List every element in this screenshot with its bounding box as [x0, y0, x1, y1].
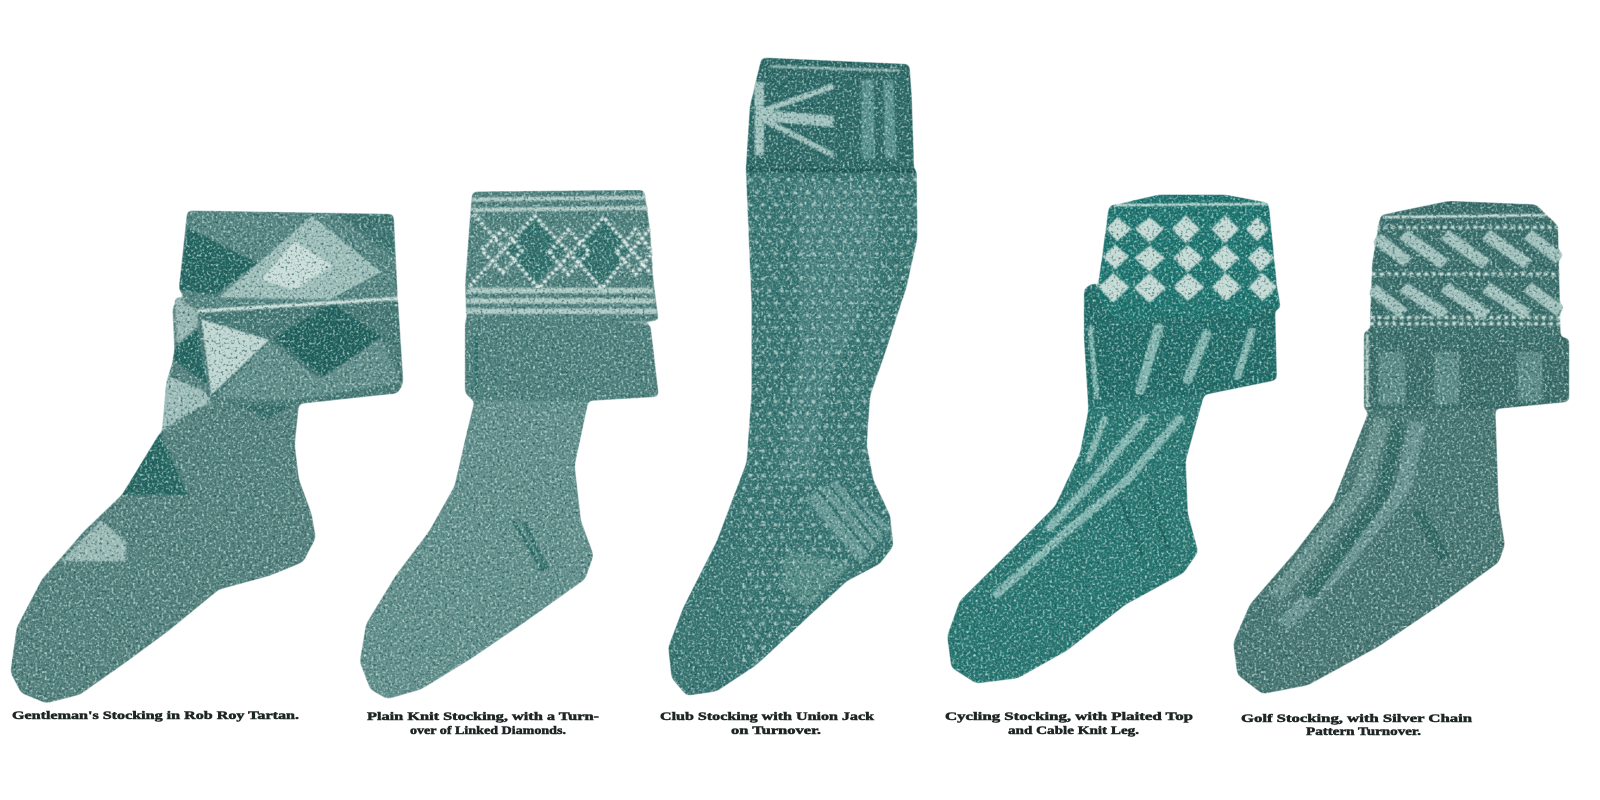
caption: club: on Turnover. [731, 725, 821, 737]
tartan leg and foot [11, 293, 316, 703]
large centre diamonds [505, 218, 633, 285]
caption: cycling: Cycling Stocking, with Plaited Top [945, 711, 1193, 723]
caption: Rob Roy tartan: Gentleman's Stocking in Rob Roy Tartan. [12, 710, 299, 722]
caption: cycling [945, 711, 1193, 737]
heel rib lines [817, 482, 885, 553]
caption: golf: Pattern Turnover. [1306, 726, 1421, 738]
top edge [1383, 215, 1546, 217]
leg stripes [1275, 419, 1445, 626]
Union Jack [757, 82, 833, 155]
tartan dark leg triangle [122, 433, 187, 495]
caption: plain knit [367, 711, 599, 737]
fold left edge [1364, 334, 1371, 408]
club leg and foot [668, 170, 917, 696]
stocking: Rob Roy tartan [11, 211, 403, 703]
caption: club: Club Stocking with Union Jack [660, 711, 875, 723]
heel ribs [805, 480, 892, 564]
plaited turnover [1097, 195, 1281, 322]
tartan light leg panel [162, 376, 213, 431]
shadow under turnover [236, 405, 293, 419]
back cuff dark triangle [179, 228, 258, 295]
cycling leg and foot [947, 394, 1204, 683]
turnover top edge [1113, 204, 1266, 205]
heel clock marks [513, 521, 547, 571]
back cuff highlight [261, 242, 333, 290]
plain knit leg and foot [360, 397, 593, 699]
front turnover [198, 298, 403, 404]
inner fold [465, 319, 659, 401]
tartan light toe patch [61, 521, 126, 561]
turnover dark diamond [274, 304, 381, 378]
back cuff light diamond [219, 216, 381, 300]
foot rib lines [1119, 492, 1169, 555]
fold line [746, 170, 917, 171]
golf leg and foot [1233, 408, 1505, 694]
left edge dark patch [173, 329, 207, 385]
caption: plain knit: Plain Knit Stocking, with a Turn- [367, 711, 599, 723]
left edge light patch [175, 295, 198, 345]
caption: club [660, 711, 875, 737]
plaited diamonds [1099, 215, 1277, 303]
stocking: cycling with plaited top and cable knit [947, 195, 1281, 683]
turnover [746, 58, 914, 168]
stocking: plain knit with linked diamonds [360, 190, 659, 699]
top stripes [471, 198, 648, 210]
tartan back cuff [179, 211, 398, 311]
caption: golf [1241, 713, 1473, 738]
patterned turnover band [465, 190, 659, 321]
stocking: club with Union Jack [668, 58, 920, 698]
turnover top edge [198, 298, 398, 311]
cable fold [1084, 282, 1277, 405]
foot panel [780, 550, 853, 608]
dot pattern [740, 170, 920, 698]
dotted rows [1370, 227, 1561, 324]
inner fold [1364, 331, 1569, 410]
caption: plain knit: over of Linked Diamonds. [410, 725, 566, 737]
turnover ribs [862, 80, 897, 159]
chain turnover [1369, 201, 1561, 345]
silver chain bands [1372, 234, 1561, 315]
cables [997, 327, 1252, 594]
stocking: golf with silver chain [1233, 201, 1569, 694]
turnover lower shade [215, 338, 402, 400]
turnover top edge [770, 66, 900, 71]
turnover light triangle [201, 319, 269, 395]
bottom stripes [466, 291, 657, 311]
linked diamonds [469, 214, 652, 288]
fold left edge [473, 335, 480, 393]
back cuff corner [337, 214, 394, 257]
caption: cycling: and Cable Knit Leg. [1008, 725, 1139, 737]
leg mottling [780, 181, 880, 480]
caption: golf: Golf Stocking, with Silver Chain [1241, 713, 1473, 725]
fold ribs [1378, 352, 1542, 405]
